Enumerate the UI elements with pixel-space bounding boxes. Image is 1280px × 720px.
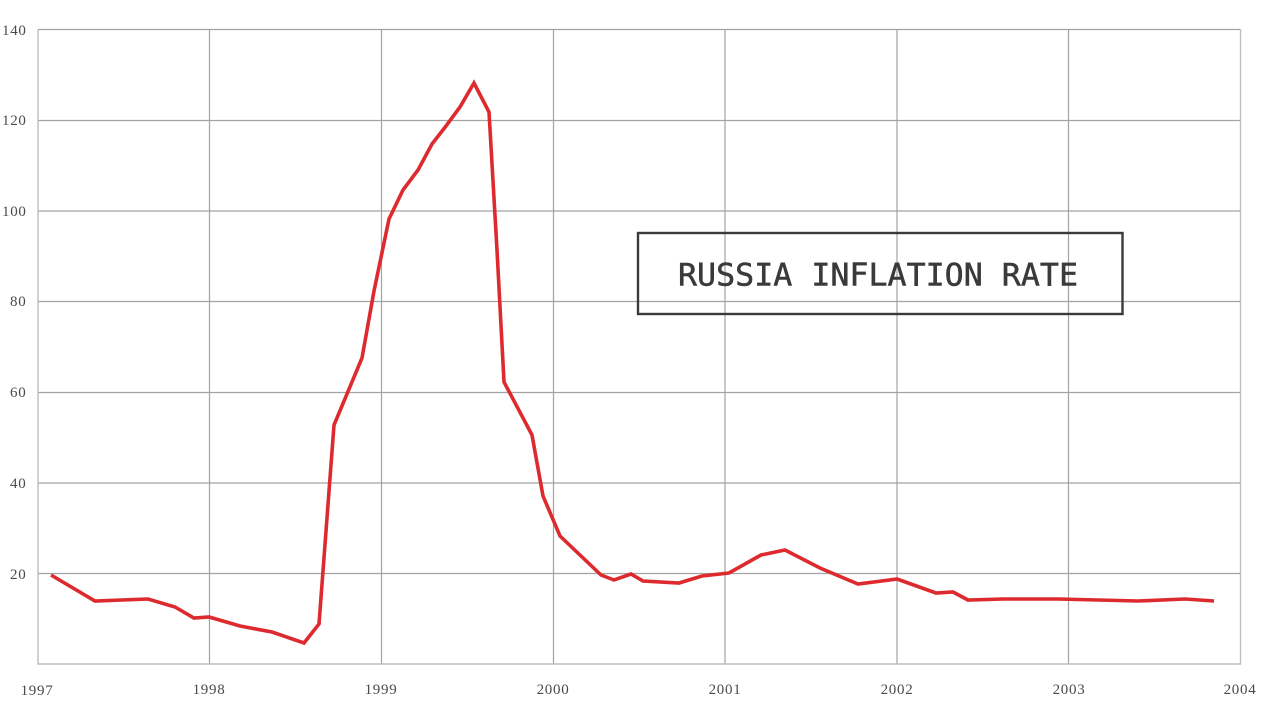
x-axis labels: 1997 [21, 683, 53, 699]
y-axis labels: 40 [10, 476, 26, 492]
x-axis labels: 2000 [537, 682, 569, 698]
x-axis labels: 1999 [365, 682, 397, 698]
y-axis labels: 20 [10, 567, 26, 583]
title box [638, 233, 1122, 314]
y-axis labels: 100 [2, 204, 27, 220]
title: RUSSIA INFLATION RATE [678, 258, 1078, 294]
y-axis labels: 140 [2, 23, 27, 39]
x-axis labels: 2004 [1224, 682, 1256, 698]
y-axis labels: 120 [2, 113, 27, 129]
y-axis labels: 60 [10, 385, 26, 401]
inflation data line [51, 83, 1214, 643]
x-axis labels [21, 682, 1256, 699]
y-axis labels: 80 [10, 294, 26, 310]
x-axis labels: 2002 [881, 682, 913, 698]
x-axis labels: 2003 [1053, 682, 1085, 698]
y-axis labels [2, 23, 27, 583]
x-axis labels: 2001 [709, 682, 741, 698]
x-axis labels: 1998 [193, 682, 225, 698]
